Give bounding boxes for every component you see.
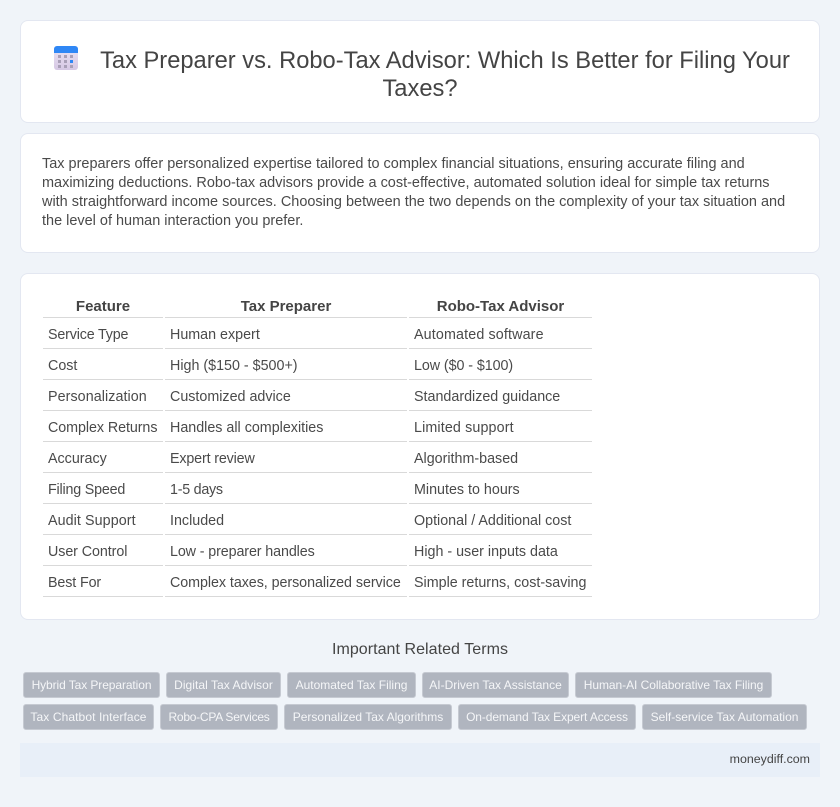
comparison table: High - user inputs data <box>414 544 558 560</box>
comparison table: Algorithm-based <box>414 451 518 467</box>
icon: calendar <box>54 46 78 70</box>
comparison table: Included <box>170 513 224 529</box>
comparison table: Low ($0 - $100) <box>414 358 513 374</box>
table header <box>76 298 564 315</box>
table header: Robo-Tax Advisor <box>437 298 564 315</box>
comparison table: Complex taxes, personalized service <box>170 575 401 591</box>
tag <box>642 704 807 730</box>
heading: important related terms: Important Related Terms <box>332 641 508 658</box>
comparison table: Expert review <box>170 451 255 467</box>
panel: title card <box>20 20 820 123</box>
comparison table: Filing Speed <box>48 482 125 498</box>
tag <box>575 672 772 698</box>
comparison table: Minutes to hours <box>414 482 520 498</box>
comparison table: Standardized guidance <box>414 389 560 405</box>
text block: summary: maximizing deductions. Robo-tax advisors provide a cost-effective, automated solution ideal for simple tax returns <box>42 175 770 191</box>
comparison table: 1-5 days <box>170 482 223 498</box>
text block: summary <box>42 156 785 229</box>
comparison table: Service Type <box>48 327 128 343</box>
text block: summary: with straightforward income sources. Choosing between the two depends on the complexity of your tax situation and <box>42 194 785 210</box>
table header: Tax Preparer <box>241 298 331 315</box>
tag <box>160 704 278 730</box>
tag <box>284 704 452 730</box>
comparison table: Customized advice <box>170 389 291 405</box>
tag: Automated Tax Filing <box>296 678 407 692</box>
comparison table: Simple returns, cost-saving <box>414 575 586 591</box>
comparison table: Accuracy <box>48 451 107 467</box>
title: Taxes? <box>382 76 458 102</box>
comparison table: Handles all complexities <box>170 420 323 436</box>
comparison table: Audit Support <box>48 513 136 529</box>
panel: summary card <box>20 133 820 253</box>
footer bar <box>20 743 820 777</box>
comparison table: Best For <box>48 575 101 591</box>
comparison table: Complex Returns <box>48 420 157 436</box>
text block: summary: the level of human interaction you prefer. <box>42 213 303 229</box>
tag: AI-Driven Tax Assistance <box>429 678 562 692</box>
tag <box>458 704 636 730</box>
tag: Hybrid Tax Preparation <box>32 678 151 692</box>
comparison table: Low - preparer handles <box>170 544 315 560</box>
comparison table: Limited support <box>414 420 514 436</box>
tag <box>287 672 416 698</box>
tag: On-demand Tax Expert Access <box>466 710 628 724</box>
tag: Tax Chatbot Interface <box>30 710 147 724</box>
panel: comparison table card <box>20 273 820 620</box>
title <box>100 48 790 102</box>
footer: site name: moneydiff.com <box>730 752 810 766</box>
tag <box>23 704 154 730</box>
tag: Human-AI Collaborative Tax Filing <box>584 678 763 692</box>
tag: Self-service Tax Automation <box>651 710 798 724</box>
comparison table: Human expert <box>170 327 260 343</box>
title: Tax Preparer vs. Robo-Tax Advisor: Which Is Better for Filing Your <box>100 48 790 74</box>
tag <box>422 672 569 698</box>
tag: Personalized Tax Algorithms <box>293 710 443 724</box>
comparison table: High ($150 - $500+) <box>170 358 298 374</box>
comparison table: Automated software <box>414 327 544 343</box>
related terms tags <box>23 672 807 730</box>
tag: Digital Tax Advisor <box>174 678 273 692</box>
tag <box>23 672 160 698</box>
comparison table: Cost <box>48 358 77 374</box>
comparison table: User Control <box>48 544 127 560</box>
table header: Feature <box>76 298 130 315</box>
comparison table: Optional / Additional cost <box>414 513 571 529</box>
text block: summary: Tax preparers offer personalized expertise tailored to complex financial situations, ensuring accurate filing and <box>42 156 745 172</box>
comparison table <box>43 298 592 597</box>
comparison table: Personalization <box>48 389 147 405</box>
tag: Robo-CPA Services <box>168 710 270 724</box>
tag <box>166 672 281 698</box>
